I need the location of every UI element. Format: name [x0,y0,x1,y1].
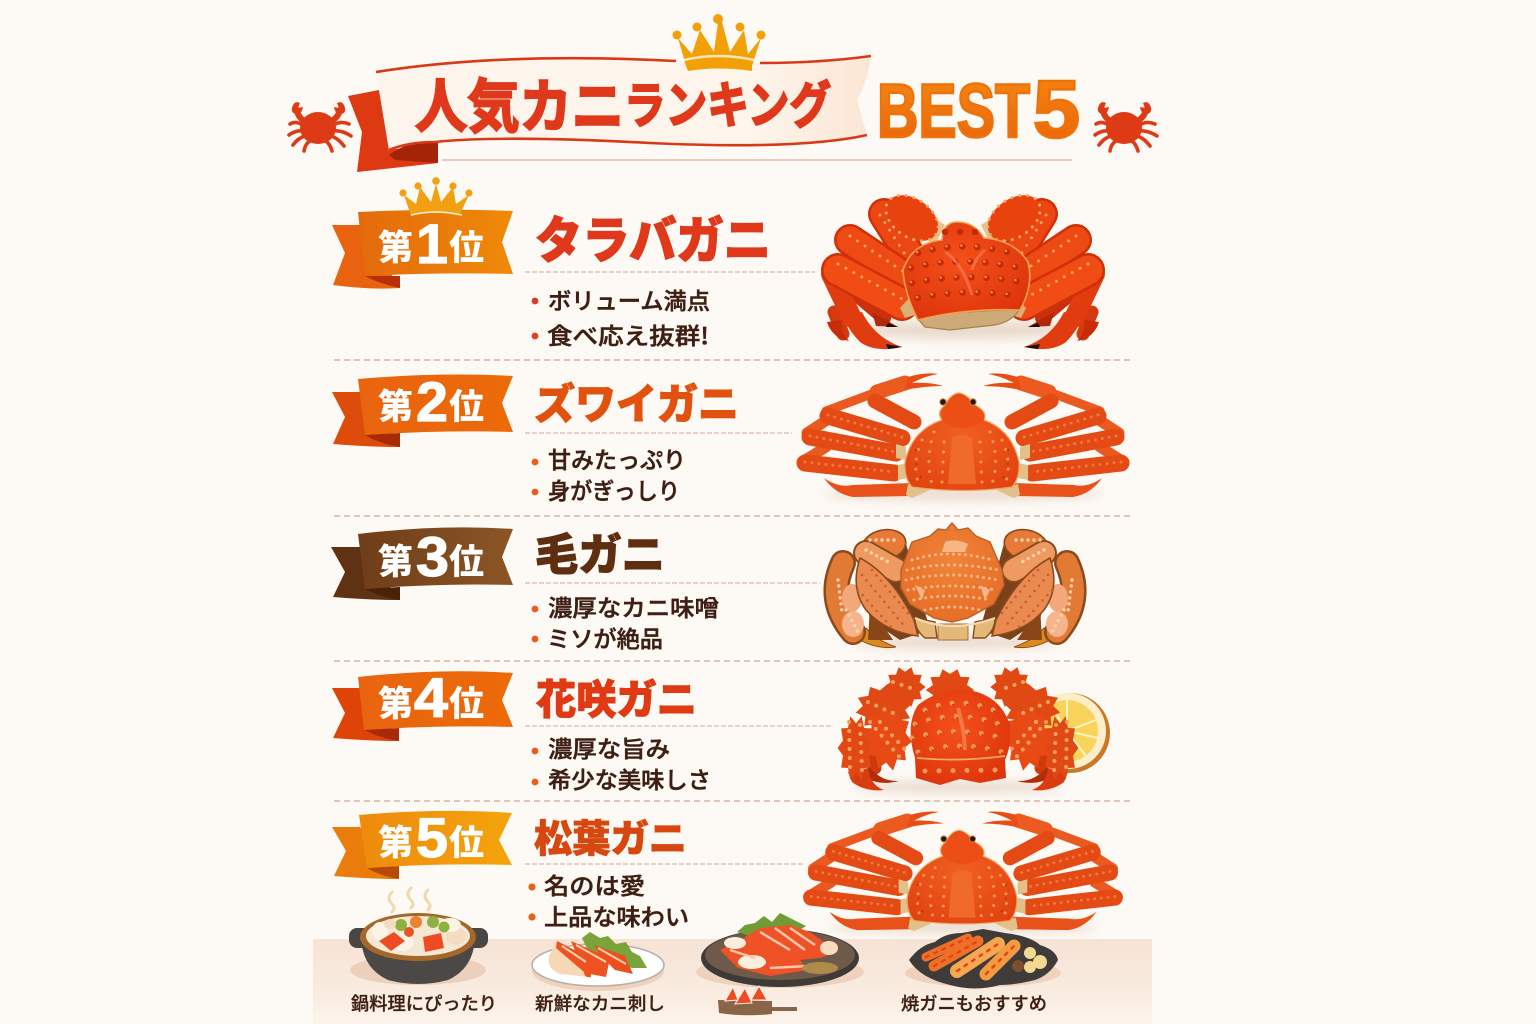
ribbon: rank 2 [332,370,513,447]
ribbon: rank 1: 1 [416,212,448,275]
bullets: rank 5 [528,867,689,932]
ribbon: rank 2: 第 [378,379,413,430]
ribbon: rank 5: 5 [416,806,448,869]
ribbon: rank 5 [332,806,512,879]
title text 2: ランキング [624,66,831,138]
crab: 花咲ガニ [838,667,1078,793]
caption: sashimi: 新鮮なカニ刺し [535,990,665,1016]
ribbon: rank 2: 位 [449,379,484,430]
name: ズワイガニ: ズワイガニ [534,371,739,432]
ribbon: rank 3 [331,525,513,600]
ribbon: rank 4: 第 [378,676,413,727]
table strip [313,939,1152,1024]
BEST text: BEST [877,69,1030,154]
carapace [903,222,1030,320]
ribbon: rank 5: 位 [449,815,484,866]
ribbon: rank 1: 第 [378,220,413,271]
shell [901,523,1004,622]
title banner [348,56,871,172]
bullets: rank 4 [532,730,711,795]
panel: rank 5 [332,806,1118,933]
title text: 人気カニ [415,60,624,144]
dish: sashimi plate [532,932,664,991]
icon: lemon [1030,693,1110,773]
bullets: rank 2: 甘みたっぷり [548,441,686,475]
ribbon: rank 4 [332,666,513,741]
underline [442,159,1072,161]
ribbon: rank 2: 2 [416,370,448,433]
panel: rank 2 [332,370,1124,506]
5 text: 5 [1033,64,1080,155]
dish: crab hot pot [349,888,488,985]
separators [334,359,1132,361]
shell [926,669,974,711]
name: タラバガニ: タラバガニ [535,201,771,273]
bullets: rank 4: 濃厚な旨み [548,730,670,764]
bullets: rank 4: 希少な美味しさ [548,761,711,795]
dish: crab sashimi platter [696,913,864,988]
ribbon: rank 1 [332,210,513,289]
caption: grilled: 焼ガニもおすすめ [901,990,1047,1016]
crown: rank 1 [399,177,473,216]
crab: 松葉ガニ [808,811,1118,933]
ribbon: rank 3: 位 [449,534,484,585]
crab: ズワイガニ [802,373,1124,500]
ribbon: rank 4: 4 [414,666,448,729]
ribbon: rank 3: 第 [378,534,413,585]
bullets: rank 1 [532,282,710,351]
panel: rank 3 [331,519,1074,654]
icon: small crab left [289,102,351,151]
name: 花咲ガニ: 花咲ガニ [536,666,697,726]
banner body [376,56,871,150]
panel: rank 1 [332,177,1099,351]
ribbon: rank 1: 位 [449,220,484,271]
bullets: rank 5: 名のは愛 [544,867,645,901]
bullets: rank 2: 身がぎっしり [548,472,680,506]
icon: small crab right [1095,102,1157,151]
bullets: rank 3 [532,589,719,654]
ribbon: rank 4: 位 [449,676,484,727]
shell [905,393,1019,490]
dish: small crab bites [718,986,797,1015]
bullets: rank 3: 濃厚なカニ味噌 [548,589,719,623]
shell underside [917,310,1019,330]
ribbon: rank 3: 3 [416,525,449,588]
name: 毛ガニ: 毛ガニ [535,519,665,583]
crown: title [672,14,766,71]
crab: 毛ガニ [836,523,1074,649]
bullets: rank 1: 食べ応え抜群! [547,317,709,351]
bullets: rank 2 [532,441,686,506]
bullets: rank 3: ミソが絶品 [547,620,663,654]
dish: grilled crab [905,929,1061,988]
name: 松葉ガニ: 松葉ガニ [534,808,687,863]
banner left tail [348,90,438,172]
bullets: rank 1: ボリューム満点 [548,282,710,316]
caption: hot pot: 鍋料理にぴったり [351,990,497,1016]
bullets: rank 5: 上品な味わい [544,898,689,932]
crab: タラバガニ [827,186,1099,349]
ribbon: rank 5: 第 [378,815,413,866]
panel: rank 4 [332,666,1110,795]
